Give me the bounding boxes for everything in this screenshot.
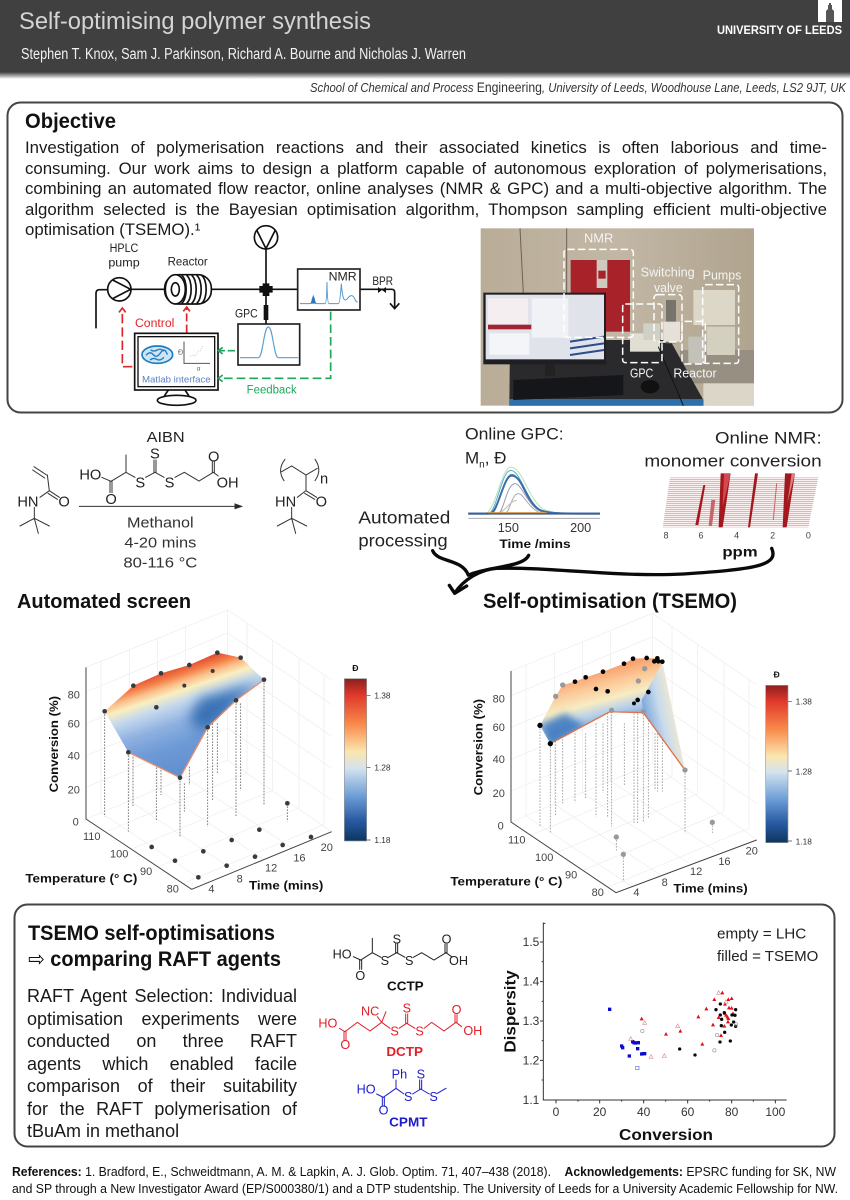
RAFT agent CCTP: O bbox=[208, 449, 219, 465]
NMR axis labels: 0 bbox=[806, 530, 811, 540]
DCTP: DCTP bbox=[386, 1045, 424, 1059]
RAFT agent structures bbox=[318, 932, 482, 1130]
tick labels: 1.2 bbox=[523, 1053, 540, 1067]
scatter plot bbox=[503, 923, 818, 1144]
surface bbox=[105, 653, 264, 778]
tick labels: 0 bbox=[498, 820, 504, 832]
CCTP: S bbox=[393, 932, 401, 946]
monitor: Matlab interface bbox=[135, 333, 218, 405]
RAFT agent CCTP: OH bbox=[217, 475, 239, 491]
NMR axis labels: 6 bbox=[698, 530, 703, 540]
tick labels: 20 bbox=[746, 845, 758, 857]
reaction scheme bbox=[17, 430, 328, 572]
legend note: filled = TSEMO bbox=[717, 949, 818, 965]
CPMT: S bbox=[417, 1067, 425, 1081]
colour bar: Đ bbox=[774, 669, 780, 679]
tick labels: 12 bbox=[265, 863, 277, 875]
DCTP: S bbox=[390, 1025, 399, 1039]
panel heading: ⇨ comparing RAFT agents bbox=[28, 947, 281, 971]
axis titles: Time (mins) bbox=[673, 881, 748, 895]
NMR box: NMR bbox=[329, 269, 357, 283]
logo: University of Leeds: UNIVERSITY OF LEEDS bbox=[717, 25, 842, 37]
DCTP: NC bbox=[361, 1005, 379, 1019]
axis titles: Conversion (%) bbox=[47, 696, 61, 792]
3D surface plot: automated screen bbox=[25, 610, 391, 896]
GPC axis labels: 200 bbox=[570, 521, 591, 535]
tick labels: 60 bbox=[493, 722, 505, 734]
RAFT agent CCTP: O bbox=[105, 492, 117, 508]
colour bar: 1.28 bbox=[374, 763, 391, 773]
objective text bbox=[25, 138, 827, 242]
NMR waterfall bbox=[663, 473, 818, 527]
CPMT bbox=[357, 1067, 446, 1130]
tick labels: 20 bbox=[68, 784, 80, 796]
GPC axis labels: 150 bbox=[498, 521, 519, 535]
feedback arrows bbox=[218, 312, 331, 382]
schematic labels: Feedback bbox=[247, 382, 298, 396]
objective text: combining an automated flow reactor, online analyses (NMR & GPC) and a multi-objective algorithm. The bbox=[25, 179, 827, 198]
CPMT: HO bbox=[357, 1082, 376, 1096]
references and acknowledgements bbox=[12, 1165, 838, 1196]
tick labels: 60 bbox=[681, 1105, 695, 1119]
axis titles: Temperature (° C) bbox=[450, 875, 562, 889]
axis titles bbox=[503, 970, 713, 1144]
legend note: empty = LHC bbox=[717, 927, 807, 943]
feed pump icon bbox=[254, 226, 278, 249]
CCTP: OH bbox=[449, 954, 468, 968]
series: CCTP bbox=[641, 1002, 738, 1057]
GPC box bbox=[238, 324, 300, 365]
reaction arrow bbox=[79, 504, 242, 509]
tick labels: 40 bbox=[68, 750, 80, 762]
tick labels: 1.3 bbox=[523, 1014, 540, 1028]
tick labels: 100 bbox=[535, 852, 553, 864]
GPC chromatogram bbox=[468, 467, 600, 518]
tick labels: 1.1 bbox=[523, 1093, 540, 1107]
panel body text: conducted on three RAFT bbox=[27, 1031, 297, 1051]
DCTP: O bbox=[452, 1003, 462, 1017]
TSEMO points bbox=[537, 656, 665, 746]
NMR axis labels bbox=[663, 530, 811, 540]
GPC heading bbox=[465, 424, 564, 470]
plot grid bbox=[86, 610, 332, 884]
tick labels: 40 bbox=[637, 1105, 651, 1119]
axes bbox=[511, 671, 757, 893]
CCTP: O bbox=[355, 969, 365, 983]
GPC heading: n bbox=[479, 459, 485, 470]
photo of rig bbox=[481, 228, 754, 406]
header banner bbox=[0, 0, 850, 79]
online analysis: ppm bbox=[722, 544, 758, 560]
axis titles: Time (mins) bbox=[249, 878, 323, 892]
objective text: Investigation of polymerisation reactions and their associated kinetics is often laborious and time- bbox=[25, 138, 827, 157]
tick labels: 20 bbox=[593, 1105, 607, 1119]
tick labels: 4 bbox=[633, 887, 639, 899]
merging arrow bbox=[433, 548, 773, 593]
automated processing label bbox=[358, 507, 450, 551]
CPMT: O bbox=[379, 1103, 389, 1117]
DCTP bbox=[318, 1002, 482, 1059]
GPC heading: M bbox=[465, 448, 479, 467]
photo of rig: valve bbox=[654, 281, 683, 295]
CPMT: S bbox=[404, 1090, 412, 1104]
panel: comparing RAFT agents bbox=[14, 904, 834, 1146]
monitor: Matlab interface: α bbox=[197, 366, 201, 373]
panel body text: comparison of their suitability bbox=[27, 1076, 297, 1096]
CPMT: Ph bbox=[392, 1067, 407, 1081]
tick labels: 8 bbox=[237, 874, 243, 886]
tick labels bbox=[523, 935, 786, 1119]
plot grid bbox=[511, 613, 757, 887]
NMR box bbox=[298, 269, 360, 310]
CPMT: S bbox=[429, 1090, 438, 1104]
photo of rig: GPC bbox=[630, 366, 653, 380]
panel body text: for the RAFT polymerisation of bbox=[27, 1099, 297, 1119]
BPR valve bbox=[378, 287, 386, 293]
tick labels bbox=[68, 690, 333, 896]
NMR heading: Online NMR: bbox=[715, 428, 822, 447]
DCTP: O bbox=[340, 1038, 350, 1052]
online analysis bbox=[358, 424, 822, 593]
RAFT agent CCTP: HO bbox=[79, 467, 101, 483]
axis titles: Dispersity bbox=[503, 970, 520, 1053]
colour bar: 1.28 bbox=[796, 766, 812, 776]
tick labels: 1.4 bbox=[523, 975, 540, 989]
tick labels: 100 bbox=[110, 849, 128, 861]
CCTP: S bbox=[405, 954, 413, 968]
pump icon bbox=[108, 278, 131, 301]
panel: objective bbox=[8, 102, 842, 412]
GPC axis labels: Time /mins bbox=[499, 538, 571, 551]
references and acknowledgements: References: 1. Bradford, E., Schweidtmann, A. M. & Lapkin, A. J. Glob. Optim. 71, 407–438 (2018). Acknowledgements: EPSRC funding for SK, NW bbox=[12, 1165, 836, 1179]
flow platform schematic bbox=[96, 226, 399, 405]
heading: self-optimisation: Self-optimisation (TSEMO) bbox=[483, 590, 737, 613]
photo of rig: Switching bbox=[641, 266, 695, 280]
colour bar: 1.38 bbox=[796, 697, 812, 707]
DCTP: S bbox=[403, 1002, 411, 1016]
schematic labels bbox=[108, 241, 393, 396]
axis titles bbox=[25, 696, 323, 892]
tick labels: 80 bbox=[725, 1105, 739, 1119]
RAFT agent CCTP: S bbox=[165, 475, 175, 491]
CPMT: CPMT bbox=[389, 1116, 428, 1130]
DCTP: HO bbox=[318, 1017, 337, 1031]
conditions: Methanol bbox=[127, 515, 194, 531]
title: Self-optimising polymer synthesis bbox=[19, 8, 371, 35]
tick labels: 80 bbox=[167, 884, 179, 896]
legend note bbox=[717, 927, 818, 965]
tick labels: 4 bbox=[208, 884, 214, 896]
GPC heading: Online GPC: bbox=[465, 424, 564, 443]
series: CPMT bbox=[608, 1008, 646, 1070]
objective text: optimisation (TSEMO).¹ bbox=[25, 220, 200, 239]
NMR heading: monomer conversion bbox=[644, 452, 822, 471]
NMR axis labels: 8 bbox=[663, 530, 668, 540]
objective text: consuming. Our work aims to design a platform capable of autonomous exploration of polymerisations, bbox=[25, 159, 827, 178]
panel heading: TSEMO self-optimisations bbox=[28, 922, 275, 945]
monitor: Matlab interface: Matlab interface bbox=[142, 374, 211, 384]
junction bbox=[259, 283, 273, 296]
heading: automated screen: Automated screen bbox=[17, 590, 191, 613]
CCTP: CCTP bbox=[387, 980, 424, 994]
conditions: 4-20 mins bbox=[124, 536, 196, 552]
tick labels: 8 bbox=[662, 877, 668, 889]
conditions bbox=[123, 515, 198, 572]
RAFT agent CCTP: S bbox=[150, 447, 160, 463]
axis titles bbox=[450, 699, 748, 895]
RAFT agent CCTP bbox=[79, 447, 239, 508]
tick labels: 16 bbox=[293, 853, 306, 865]
monomer bbox=[17, 467, 70, 533]
polymer: O bbox=[316, 495, 327, 511]
colour bar bbox=[344, 663, 391, 845]
LHC points bbox=[553, 666, 715, 857]
control arrows bbox=[119, 307, 190, 367]
tick labels: 20 bbox=[321, 842, 333, 854]
schematic labels: pump bbox=[108, 256, 140, 270]
schematic labels: HPLC bbox=[110, 241, 139, 255]
conditions: 80-116 °C bbox=[123, 556, 198, 572]
monomer: O bbox=[58, 495, 70, 511]
NMR heading bbox=[644, 428, 822, 471]
polymer bbox=[275, 459, 328, 533]
authors: Stephen T. Knox, Sam J. Parkinson, Richard A. Bourne and Nicholas J. Warren bbox=[21, 46, 466, 63]
tick labels: 80 bbox=[68, 690, 80, 702]
coil reactor icon bbox=[165, 275, 211, 304]
references and acknowledgements: and SP through a New Investigator Award (EP/S000380/1) and a DTP studentship. The University of Leeds for a University Academic Fellowship for NW. bbox=[12, 1182, 838, 1196]
monomer: HN bbox=[17, 495, 39, 511]
axes bbox=[86, 667, 332, 889]
GPC axis labels bbox=[498, 521, 591, 551]
logo: University of Leeds bbox=[717, 0, 842, 37]
photo of rig: Reactor bbox=[673, 366, 717, 380]
NMR axis labels: 2 bbox=[770, 530, 775, 540]
tick labels: 40 bbox=[493, 754, 505, 766]
polymer: n bbox=[320, 471, 328, 487]
CCTP: O bbox=[442, 932, 452, 946]
tick labels: 60 bbox=[68, 718, 80, 730]
colour bar: Đ bbox=[352, 663, 358, 673]
panel body text bbox=[27, 985, 297, 1145]
reagents: AIBN bbox=[147, 430, 185, 446]
DCTP: S bbox=[415, 1025, 424, 1039]
polymer: HN bbox=[275, 495, 296, 511]
tick labels: 80 bbox=[493, 693, 505, 705]
panel body text: optimisation experiments were bbox=[27, 1009, 297, 1029]
CCTP: HO bbox=[333, 947, 352, 961]
drop lines bbox=[105, 680, 287, 837]
panel heading bbox=[28, 922, 281, 971]
drop lines bbox=[540, 685, 712, 882]
schematic labels: Reactor bbox=[168, 255, 208, 269]
schematic labels: BPR bbox=[372, 274, 393, 288]
tick labels: 20 bbox=[493, 788, 505, 800]
automated processing label: Automated bbox=[358, 507, 450, 527]
monitor: Matlab interface: Đ bbox=[178, 347, 183, 356]
colour bar: 1.18 bbox=[374, 835, 391, 845]
CCTP: S bbox=[381, 954, 389, 968]
GPC heading: , Đ bbox=[485, 448, 506, 467]
axis titles: Temperature (° C) bbox=[25, 871, 137, 885]
objective heading: Objective bbox=[25, 110, 116, 133]
objective text: algorithm selected is the Bayesian optimisation algorithm, Thompson sampling efficient multi-objective bbox=[25, 200, 827, 219]
tick labels: 90 bbox=[140, 866, 152, 878]
panel body text: RAFT Agent Selection: Individual bbox=[27, 986, 297, 1006]
tick labels: 12 bbox=[690, 866, 702, 878]
tick labels bbox=[493, 693, 758, 899]
tick labels: 0 bbox=[553, 1105, 560, 1119]
colour bar: 1.38 bbox=[374, 691, 391, 701]
plot axes bbox=[540, 923, 787, 1103]
photo of rig: NMR bbox=[584, 232, 613, 246]
automated processing label: processing bbox=[358, 531, 448, 551]
RAFT agent CCTP: S bbox=[135, 475, 145, 491]
tick labels: 90 bbox=[565, 869, 577, 881]
colour bar bbox=[766, 669, 812, 847]
photo of rig: Pumps bbox=[703, 268, 741, 282]
DCTP: OH bbox=[463, 1024, 482, 1038]
NMR axis labels: 4 bbox=[734, 530, 739, 540]
axis titles: Conversion (%) bbox=[471, 699, 485, 795]
tick labels: 110 bbox=[83, 831, 101, 843]
surface bbox=[540, 658, 685, 770]
tick labels: 1.5 bbox=[523, 935, 540, 949]
schematic labels: GPC bbox=[235, 306, 258, 320]
colour bar: 1.18 bbox=[796, 837, 812, 847]
data points bbox=[102, 650, 313, 880]
tick labels: 80 bbox=[592, 887, 604, 899]
tick labels: 110 bbox=[508, 834, 526, 846]
panel body text: tBuAm in methanol bbox=[27, 1121, 179, 1141]
3D surface plot: self-optimisation bbox=[450, 613, 812, 899]
tick labels: 16 bbox=[718, 856, 731, 868]
panel body text: agents which enabled facile bbox=[27, 1054, 297, 1074]
schematic labels: Control bbox=[135, 316, 174, 330]
tick labels: 100 bbox=[765, 1105, 786, 1119]
CCTP bbox=[333, 932, 468, 994]
series: DCTP bbox=[629, 991, 735, 1058]
axis titles: Conversion bbox=[619, 1127, 713, 1144]
tick labels: 0 bbox=[73, 817, 79, 829]
